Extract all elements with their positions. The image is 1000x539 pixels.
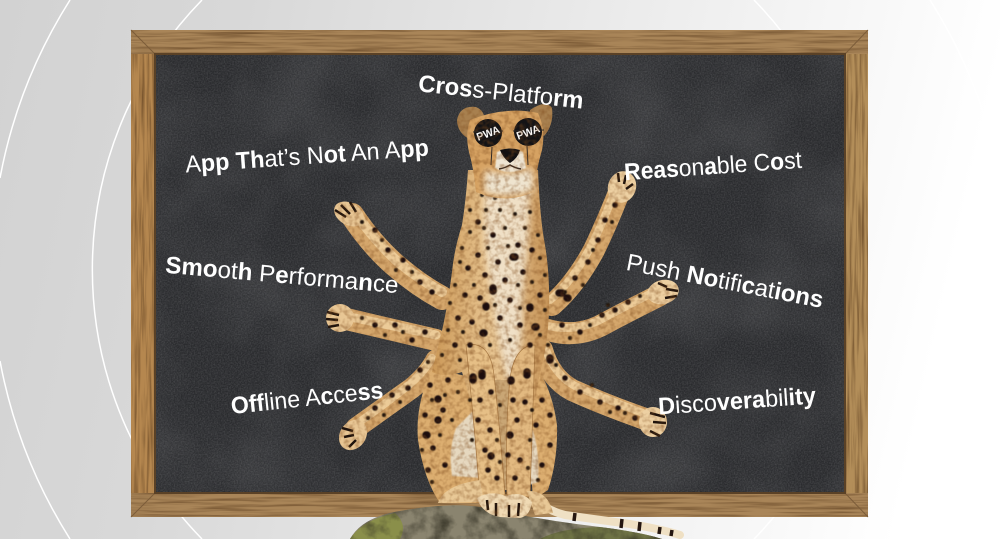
front leg right: [506, 345, 535, 497]
tail: [533, 497, 680, 536]
spots: small: [362, 180, 640, 482]
front leg left: [466, 344, 505, 497]
hind paws: [438, 480, 553, 515]
arm: middle left: [326, 304, 436, 340]
ear left: [457, 107, 484, 141]
label: Smooth Performance: Smooth Performance: [164, 252, 400, 299]
sunglasses: PWA: [515, 123, 542, 143]
label: Cross-Platform: Cross-Platform: [417, 70, 585, 115]
arm: upper left: [330, 196, 442, 298]
haunches: [418, 368, 557, 503]
label: Push Notifications: Push Notifications: [624, 249, 826, 314]
centre shadow: [495, 380, 520, 490]
sunglasses: [473, 118, 544, 165]
spots: [362, 180, 640, 482]
label: Discoverability: Discoverability: [657, 382, 817, 420]
chest fur: [484, 182, 529, 400]
arm: middle right: [548, 276, 682, 333]
muzzle: [495, 149, 526, 172]
neck fluff: [484, 168, 534, 196]
chalkboard frame: [131, 30, 868, 517]
chalkboard surface: [154, 53, 846, 494]
mouth: [499, 165, 521, 169]
belly fur: [451, 410, 538, 488]
spots: medium: [375, 205, 635, 478]
ear right: [530, 104, 552, 136]
head: [467, 111, 543, 198]
sunglasses: PWA: [475, 124, 502, 144]
arm: upper right: [550, 167, 641, 305]
label: Offline Access: Offline Access: [230, 377, 385, 420]
nose: [500, 148, 520, 163]
label: App That's Not An App: App That’s Not An App: [184, 135, 430, 178]
label: Reasonable Cost: Reasonable Cost: [623, 147, 803, 186]
body: [432, 170, 549, 420]
cheetah: [326, 104, 682, 518]
arm: lower right: [542, 350, 667, 437]
front paws: [477, 493, 532, 518]
rock: [350, 505, 662, 539]
arm: lower left: [333, 358, 436, 456]
spots: large: [426, 257, 568, 456]
